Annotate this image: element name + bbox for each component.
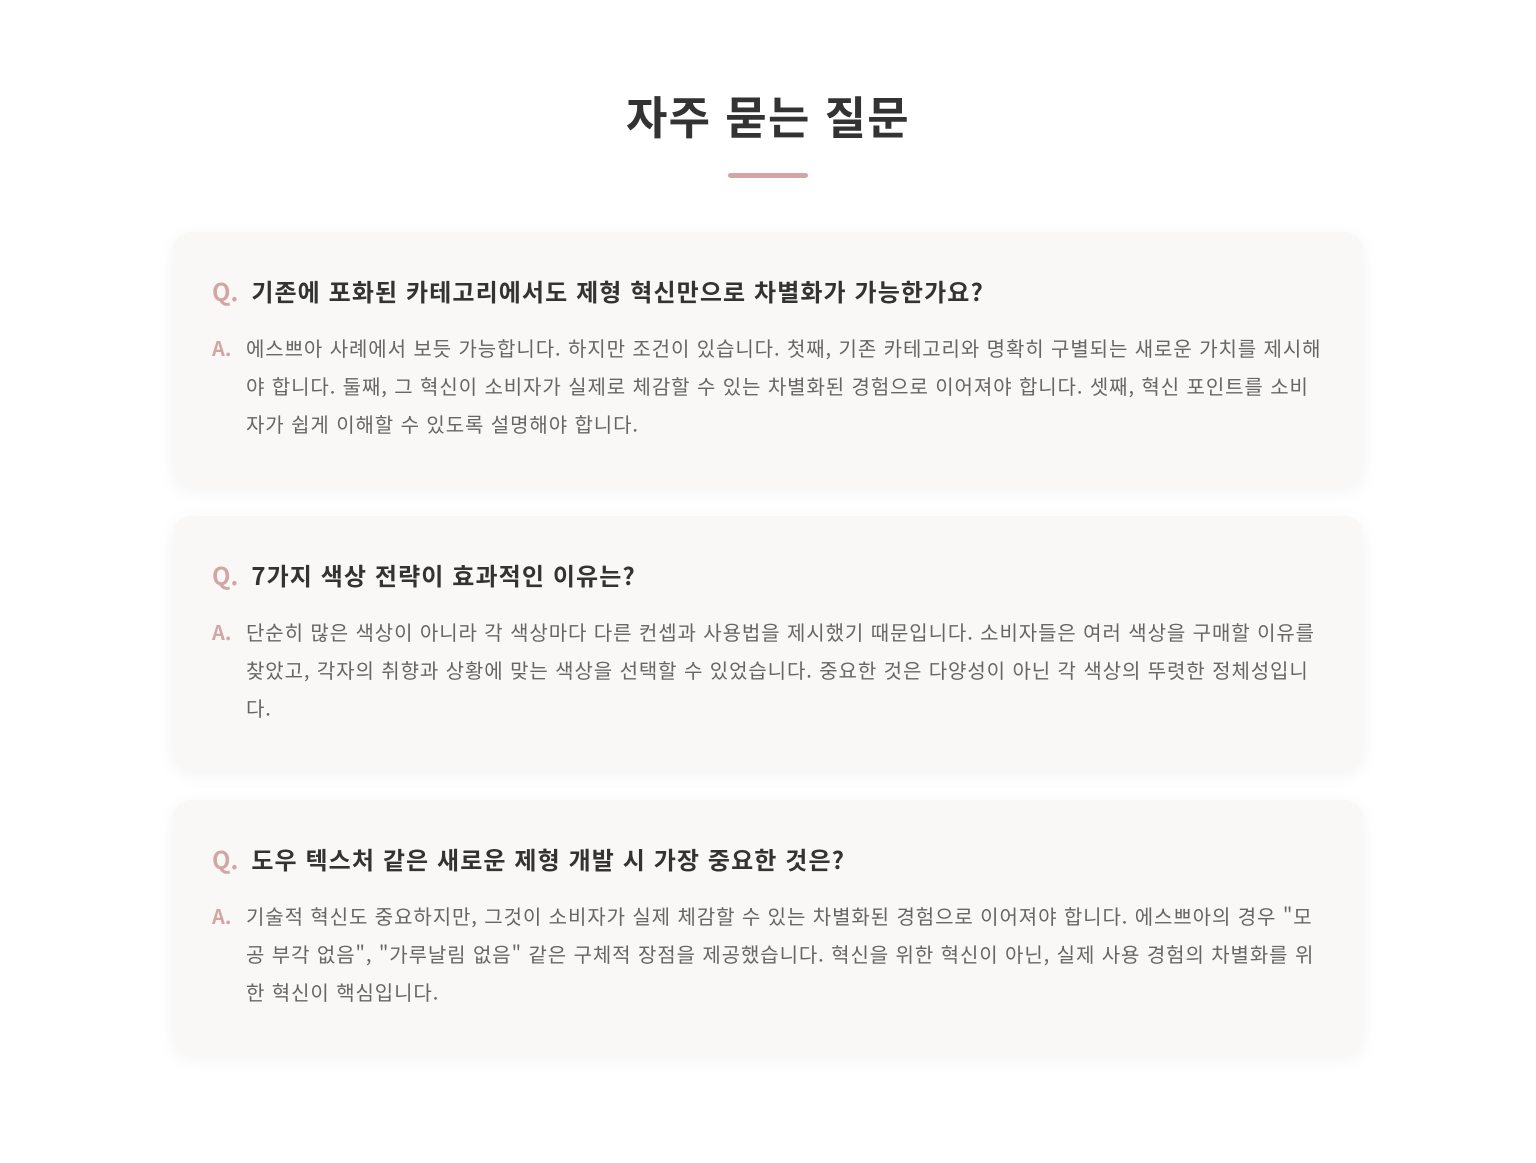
- answer 3: [212, 901, 1314, 1006]
- answer 1: 에스쁘아 사례에서 보듯 가능합니다. 하지만 조건이 있습니다. 첫째, 기존 카테고리와 명확히 구별되는 새로운 가치를 제시해: [246, 333, 1321, 362]
- panel: FAQ 2: [173, 516, 1363, 771]
- answer 2: 다.: [246, 693, 272, 722]
- answer 1: 자가 쉽게 이해할 수 있도록 설명해야 합니다.: [246, 409, 639, 438]
- answer 3: 공 부각 없음", "가루날림 없음" 같은 구체적 장점을 제공했습니다. 혁신을 위한 혁신이 아닌, 실제 사용 경험의 차별화를 위: [246, 939, 1314, 968]
- answer 1: 야 합니다. 둘째, 그 혁신이 소비자가 실제로 체감할 수 있는 차별화된 경험으로 이어져야 합니다. 셋째, 혁신 포인트를 소비: [246, 371, 1309, 400]
- answer 2: A.: [212, 617, 231, 646]
- panel: FAQ 1: [173, 232, 1363, 487]
- answer 2: [212, 617, 1315, 722]
- answer 3: 기술적 혁신도 중요하지만, 그것이 소비자가 실제 체감할 수 있는 차별화된 경험으로 이어져야 합니다. 에스쁘아의 경우 "모: [246, 901, 1313, 930]
- answer 3: 한 혁신이 핵심입니다.: [246, 977, 439, 1006]
- answer 2: 찾았고, 각자의 취향과 상황에 맞는 색상을 선택할 수 있었습니다. 중요한 것은 다양성이 아닌 각 색상의 뚜렷한 정체성입니: [246, 655, 1309, 684]
- answer 2: 단순히 많은 색상이 아니라 각 색상마다 다른 컨셉과 사용법을 제시했기 때문입니다. 소비자들은 여러 색상을 구매할 이유를: [246, 617, 1315, 646]
- title underline: [728, 173, 808, 178]
- answer 3: A.: [212, 901, 231, 930]
- answer 1: A.: [212, 333, 231, 362]
- panel: FAQ 3: [173, 800, 1363, 1055]
- question 1: Q. 기존에 포화된 카테고리에서도 제형 혁신만으로 차별화가 가능한가요?: [212, 273, 984, 308]
- question 2: Q. 7가지 색상 전략이 효과적인 이유는?: [212, 557, 636, 592]
- answer 1: [212, 333, 1321, 438]
- title: 자주 묻는 질문: [626, 82, 910, 147]
- question 3: Q. 도우 텍스처 같은 새로운 제형 개발 시 가장 중요한 것은?: [212, 841, 845, 876]
